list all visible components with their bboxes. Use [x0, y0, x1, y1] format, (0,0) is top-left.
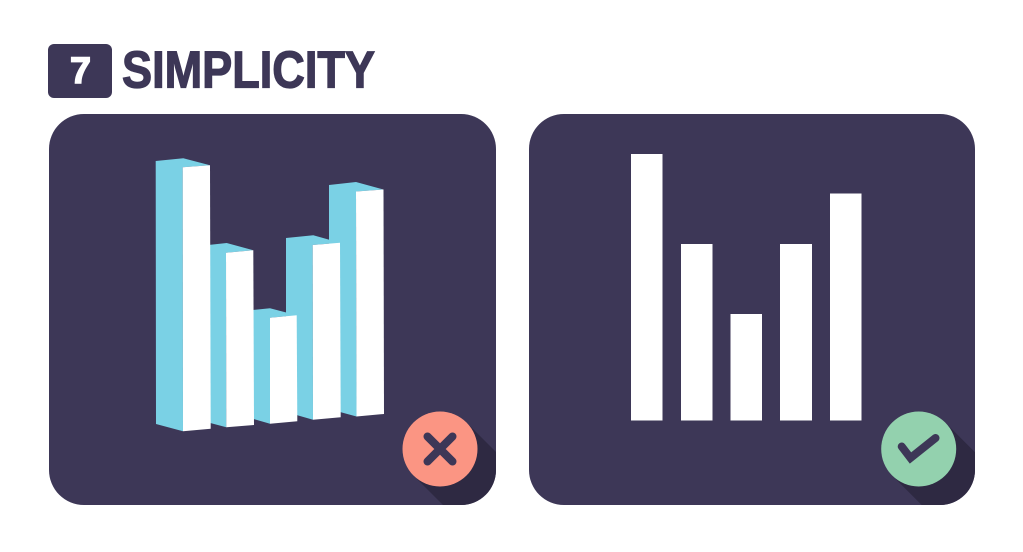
title: SIMPLICITY: [122, 42, 375, 100]
panel: bad example: [49, 114, 496, 505]
number badge: [48, 44, 112, 98]
bar 2: [199, 243, 254, 427]
bar 4: [286, 235, 341, 420]
flat bar chart: [631, 154, 862, 420]
3D bar chart: [156, 158, 384, 431]
bar 3: [243, 308, 297, 424]
infographic canvas: [48, 44, 975, 505]
icon: check badge: [881, 412, 975, 505]
bar 1: [156, 158, 211, 431]
icon: cross badge: [402, 412, 496, 505]
number badge: 7: [70, 50, 91, 91]
panel: good example: [529, 114, 975, 505]
bar 5: [329, 182, 384, 416]
